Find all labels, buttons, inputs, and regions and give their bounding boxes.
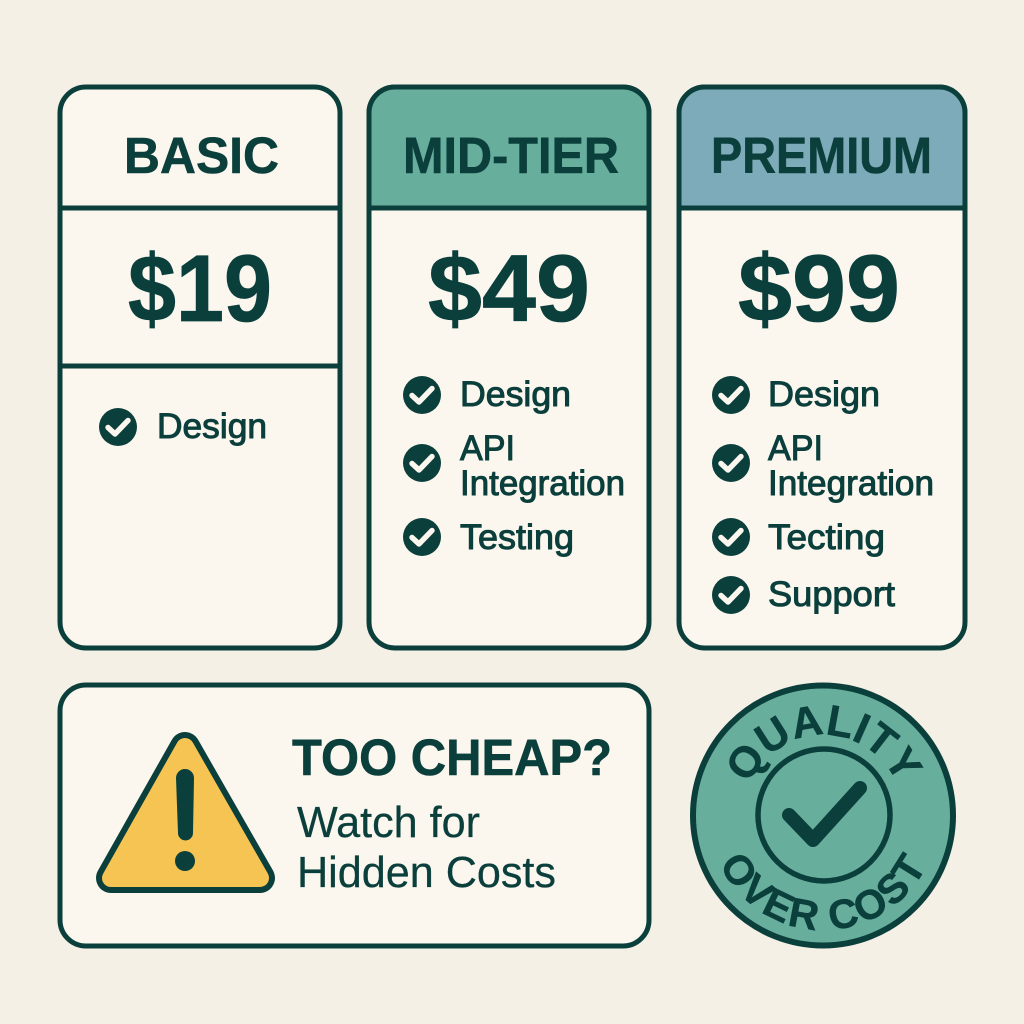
feature list: mid-tier — [403, 375, 625, 557]
panel: basic plan — [60, 87, 340, 648]
heading: premium: PREMIUM — [711, 127, 932, 184]
feature list: mid-tier: Integration — [460, 464, 625, 503]
callout text line two: Hidden Costs — [297, 848, 556, 897]
badge text: quality: QUALITY — [729, 705, 924, 778]
feature list: mid-tier: API — [460, 429, 515, 468]
heading: basic: BASIC — [124, 127, 279, 184]
price: $19: $19 — [128, 236, 272, 342]
panel: mid-tier plan — [369, 87, 649, 648]
price: $49: $49 — [428, 236, 590, 342]
feature list: mid-tier: Design — [460, 375, 571, 414]
callout text: Watch for — [297, 798, 480, 847]
icon: badge check — [789, 788, 860, 840]
icon: warning triangle — [111, 747, 260, 878]
icon: check — [99, 408, 137, 446]
feature list: premium: Support — [768, 575, 895, 614]
header band: premium — [679, 87, 965, 208]
feature list: premium: Integration — [768, 464, 934, 503]
feature list: premium — [712, 375, 934, 614]
feature list: mid-tier: Testing — [460, 518, 574, 557]
badge: quality over cost — [690, 682, 956, 948]
callout heading: TOO CHEAP? — [292, 729, 612, 786]
header band: mid-tier — [369, 87, 649, 208]
panel: hidden costs warning — [60, 685, 649, 946]
price: $99: $99 — [738, 236, 900, 342]
badge text: over cost: OVER COST — [724, 851, 922, 931]
feature: design: Design — [157, 407, 267, 446]
heading: mid-tier: MID-TIER — [403, 127, 619, 184]
feature list: premium: Design — [768, 375, 880, 414]
feature list: premium: API — [768, 429, 823, 468]
panel: premium plan — [679, 87, 965, 648]
feature list: premium: Tecting — [768, 518, 885, 557]
